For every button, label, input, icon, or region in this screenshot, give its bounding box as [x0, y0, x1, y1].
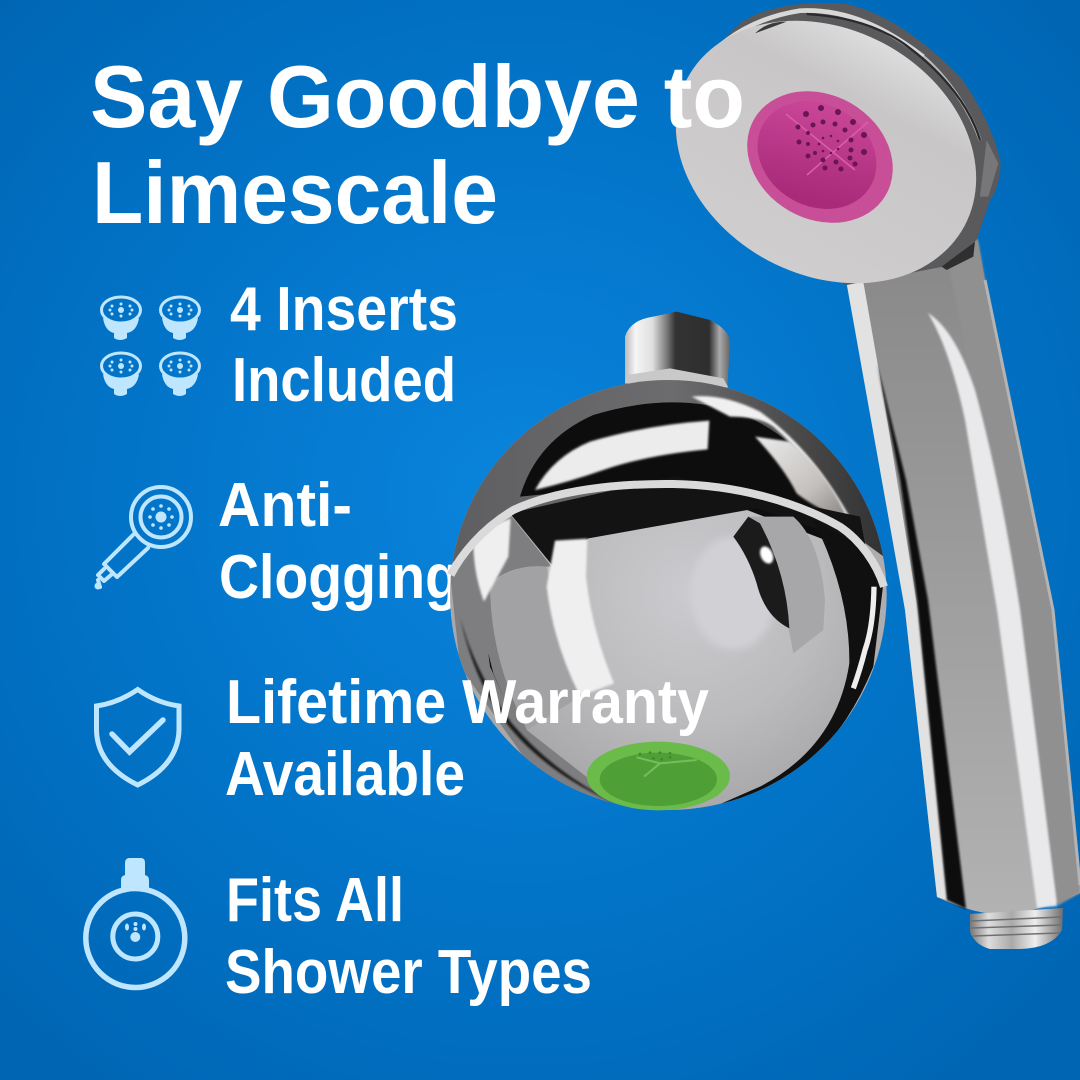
insert 1	[102, 297, 140, 340]
black arc in cap	[520, 402, 822, 539]
text: fits all shower types: Fits All	[226, 866, 404, 935]
product: handheld shower head	[630, 0, 1080, 949]
lamp glint	[757, 544, 776, 566]
title: Say Goodbye to	[90, 47, 745, 146]
icon: four inserts	[102, 297, 200, 396]
head shell	[675, 3, 1001, 285]
text: lifetime warranty available: Available	[225, 740, 465, 809]
text: lifetime warranty available	[225, 668, 709, 809]
feature: lifetime warranty	[96, 668, 709, 809]
left panel	[490, 566, 580, 730]
icon: shield with check	[96, 690, 179, 785]
dark crescent	[733, 517, 789, 628]
handle	[846, 225, 1080, 915]
left white streak	[473, 518, 511, 602]
text: 4 inserts included: Included	[232, 346, 456, 415]
stem	[625, 312, 730, 388]
ribbed upper right reflection	[754, 435, 846, 514]
pink insert	[723, 65, 917, 249]
icon: round shower head	[86, 858, 185, 988]
bright upper-right sliver	[692, 394, 850, 514]
black under ring	[512, 488, 866, 565]
threaded connector	[970, 908, 1063, 949]
stem collar	[625, 368, 728, 387]
rim highlights	[685, 10, 923, 90]
upper white reflection	[535, 421, 709, 490]
head face	[630, 0, 1022, 334]
insert 2	[160, 297, 200, 340]
soft lower highlight	[697, 537, 773, 650]
inner rim shadow	[755, 22, 787, 33]
feature: 4 inserts included	[102, 275, 458, 415]
white ring band	[451, 484, 884, 587]
green insert	[587, 742, 730, 810]
sphere reflections	[450, 380, 883, 804]
upper cap	[452, 380, 883, 562]
text: fits all shower types	[225, 866, 592, 1007]
text: lifetime warranty available: Lifetime Warranty	[226, 668, 709, 737]
text: fits all shower types: Shower Types	[225, 938, 592, 1007]
feature: fits all shower types	[86, 858, 592, 1007]
text: anti-clogging: Anti-	[218, 471, 352, 540]
right grey panel	[750, 517, 825, 653]
product: round chrome shower head	[440, 312, 907, 810]
title: Limescale	[92, 143, 498, 242]
left white reflection	[547, 539, 614, 696]
insert 4	[160, 353, 200, 396]
insert 3	[102, 353, 140, 396]
text: anti-clogging	[218, 471, 459, 612]
left edge shading	[450, 517, 627, 808]
head	[630, 0, 1022, 334]
right dark crescent	[720, 538, 883, 804]
title	[90, 47, 745, 242]
sphere	[450, 380, 887, 810]
icon: hand shower	[94, 487, 191, 590]
text: 4 inserts included: 4 Inserts	[230, 275, 458, 344]
text: anti-clogging: Clogging	[219, 543, 459, 612]
right bright rim	[853, 587, 874, 688]
text: 4 inserts included	[230, 275, 458, 415]
lower left dark rim	[460, 622, 615, 804]
